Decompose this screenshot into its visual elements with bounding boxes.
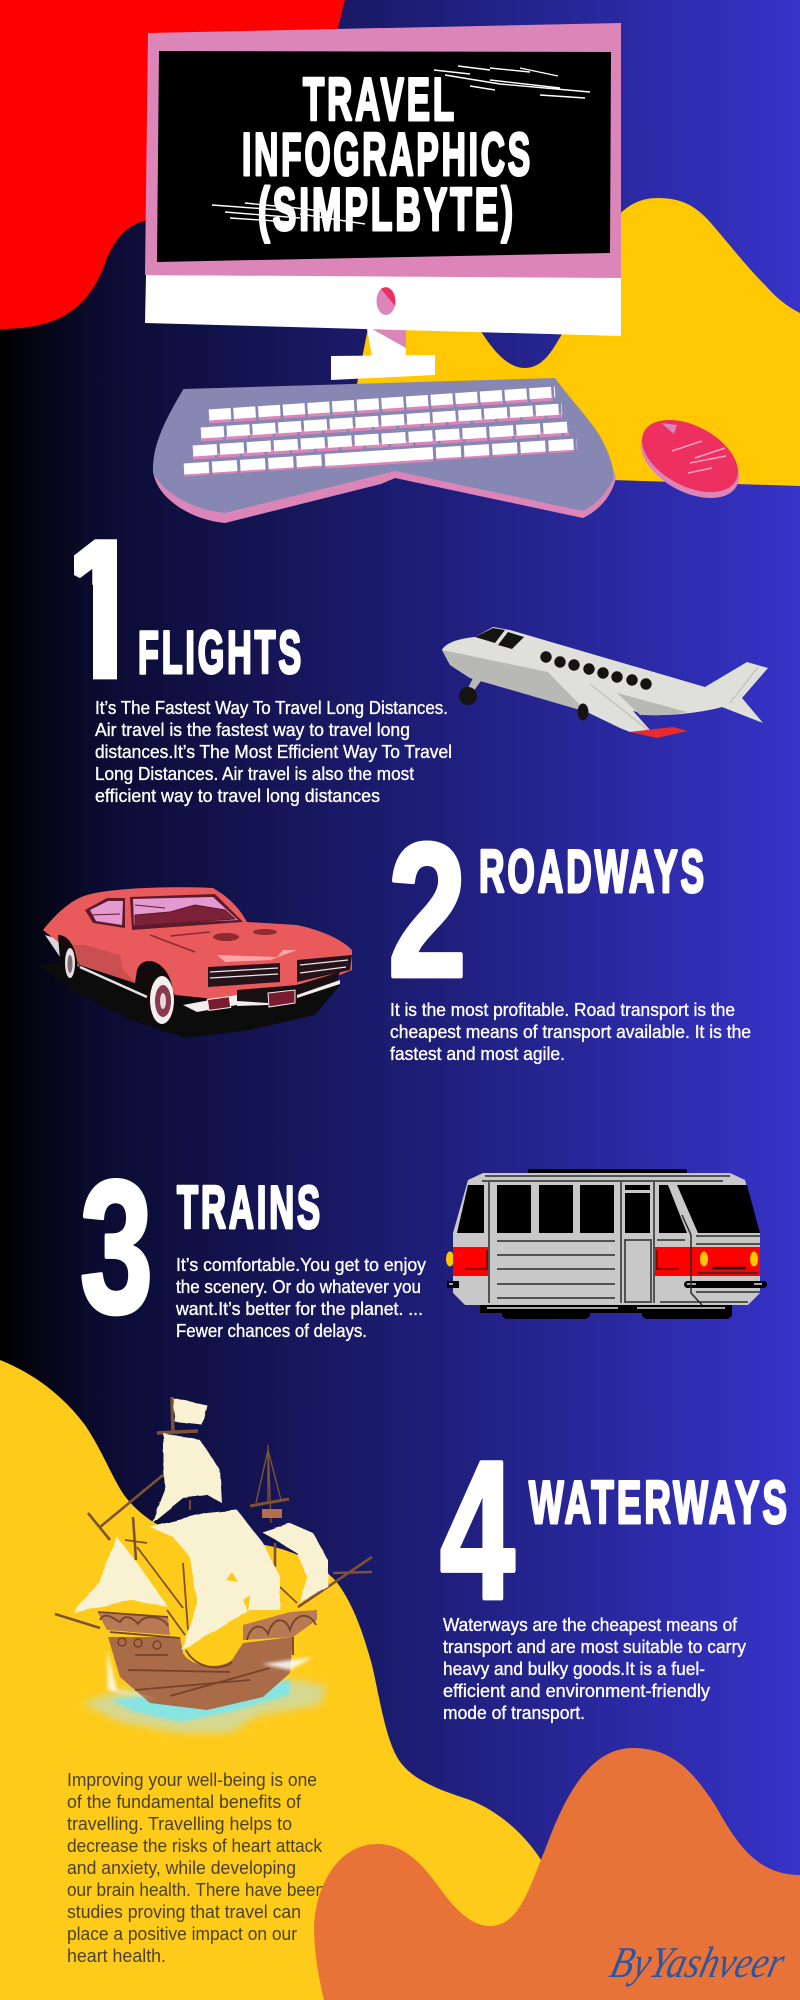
- icon: airplane: [442, 627, 768, 738]
- flights text: [95, 697, 452, 806]
- wellbeing paragraph: [67, 1769, 325, 1966]
- roadways text: It is the most profitable. Road transport is the: [390, 999, 735, 1020]
- sails: [73, 1398, 328, 1613]
- number 3: 3: [80, 1143, 153, 1353]
- background blob: red top left: [0, 0, 345, 329]
- number 1: 1: [56, 500, 147, 719]
- wellbeing paragraph: and anxiety, while developing: [67, 1857, 296, 1878]
- water: [82, 1680, 327, 1733]
- icon: sailing ship: [55, 1397, 372, 1733]
- flights text: Long Distances. Air travel is also the most: [95, 763, 414, 784]
- wellbeing paragraph: decrease the risks of heart attack: [67, 1835, 323, 1856]
- mouse: [629, 405, 751, 513]
- icon: red car: [38, 887, 352, 1038]
- flights text: Air travel is the fastest way to travel long: [95, 719, 410, 740]
- keyboard keys: [184, 392, 577, 474]
- title: TRAVEL: [303, 66, 457, 133]
- rigging: [55, 1397, 372, 1635]
- flights text: distances.It’s The Most Efficient Way To Travel: [95, 741, 452, 762]
- number 4: 4: [440, 1419, 515, 1640]
- roadways text: cheapest means of transport available. It is the: [390, 1021, 751, 1042]
- background blob: yellow bottom left: [0, 1360, 560, 2000]
- wellbeing paragraph: heart health.: [67, 1945, 166, 1966]
- monitor chin: [145, 275, 621, 336]
- section 3: trains: [80, 1143, 767, 1353]
- screen scratches: [212, 66, 590, 224]
- hull: [98, 1610, 317, 1710]
- section 2: roadways: [38, 803, 751, 1064]
- background blob: orange bottom right: [314, 1748, 800, 2000]
- wellbeing paragraph: travelling. Travelling helps to: [67, 1813, 292, 1834]
- illustration: desktop computer: [145, 23, 751, 523]
- keyboard: [153, 378, 616, 523]
- roadways text: fastest and most agile.: [390, 1043, 565, 1064]
- section 4: waterways: [55, 1397, 790, 1733]
- monitor stand: [331, 329, 435, 380]
- monitor frame: [145, 23, 621, 279]
- number 2: 2: [388, 803, 467, 1017]
- wellbeing paragraph: Improving your well-being is one: [67, 1769, 317, 1790]
- heading: flights: FLIGHTS: [138, 619, 304, 686]
- wellbeing paragraph: studies proving that travel can: [67, 1901, 301, 1922]
- waterways text: heavy and bulky goods.It is a fuel-: [443, 1658, 705, 1679]
- flights text: efficient way to travel long distances: [95, 785, 380, 806]
- waterways text: efficient and environment-friendly: [443, 1680, 711, 1701]
- heading: trains: TRAINS: [177, 1174, 323, 1241]
- icon: train: [446, 1169, 767, 1319]
- title: INFOGRAPHICS: [242, 121, 533, 188]
- trains text: Fewer chances of delays.: [176, 1320, 367, 1341]
- section 1: flights: [56, 500, 768, 806]
- flights text: It’s The Fastest Way To Travel Long Distances.: [95, 697, 448, 718]
- wellbeing paragraph: of the fundamental benefits of: [67, 1791, 302, 1812]
- title: [242, 66, 533, 243]
- roadways text: [390, 999, 751, 1064]
- title: (SIMPLBYTE): [258, 176, 516, 243]
- trains text: want.It’s better for the planet. ...: [175, 1298, 423, 1319]
- trains text: It’s comfortable.You get to enjoy: [176, 1254, 427, 1275]
- waterways text: mode of transport.: [443, 1702, 585, 1723]
- trains text: the scenery. Or do whatever you: [176, 1276, 421, 1297]
- background blob: yellow top right: [357, 198, 800, 486]
- wellbeing paragraph: our brain health. There have been: [67, 1879, 325, 1900]
- trains text: [175, 1254, 427, 1341]
- wellbeing paragraph: place a positive impact on our: [67, 1923, 297, 1944]
- splash: [107, 1650, 313, 1700]
- waterways text: [443, 1614, 747, 1723]
- waterways text: Waterways are the cheapest means of: [443, 1614, 738, 1635]
- main sail: [150, 1510, 280, 1650]
- waterways text: transport and are most suitable to carry: [443, 1636, 747, 1657]
- monitor button: [376, 287, 396, 315]
- monitor screen: [157, 51, 611, 262]
